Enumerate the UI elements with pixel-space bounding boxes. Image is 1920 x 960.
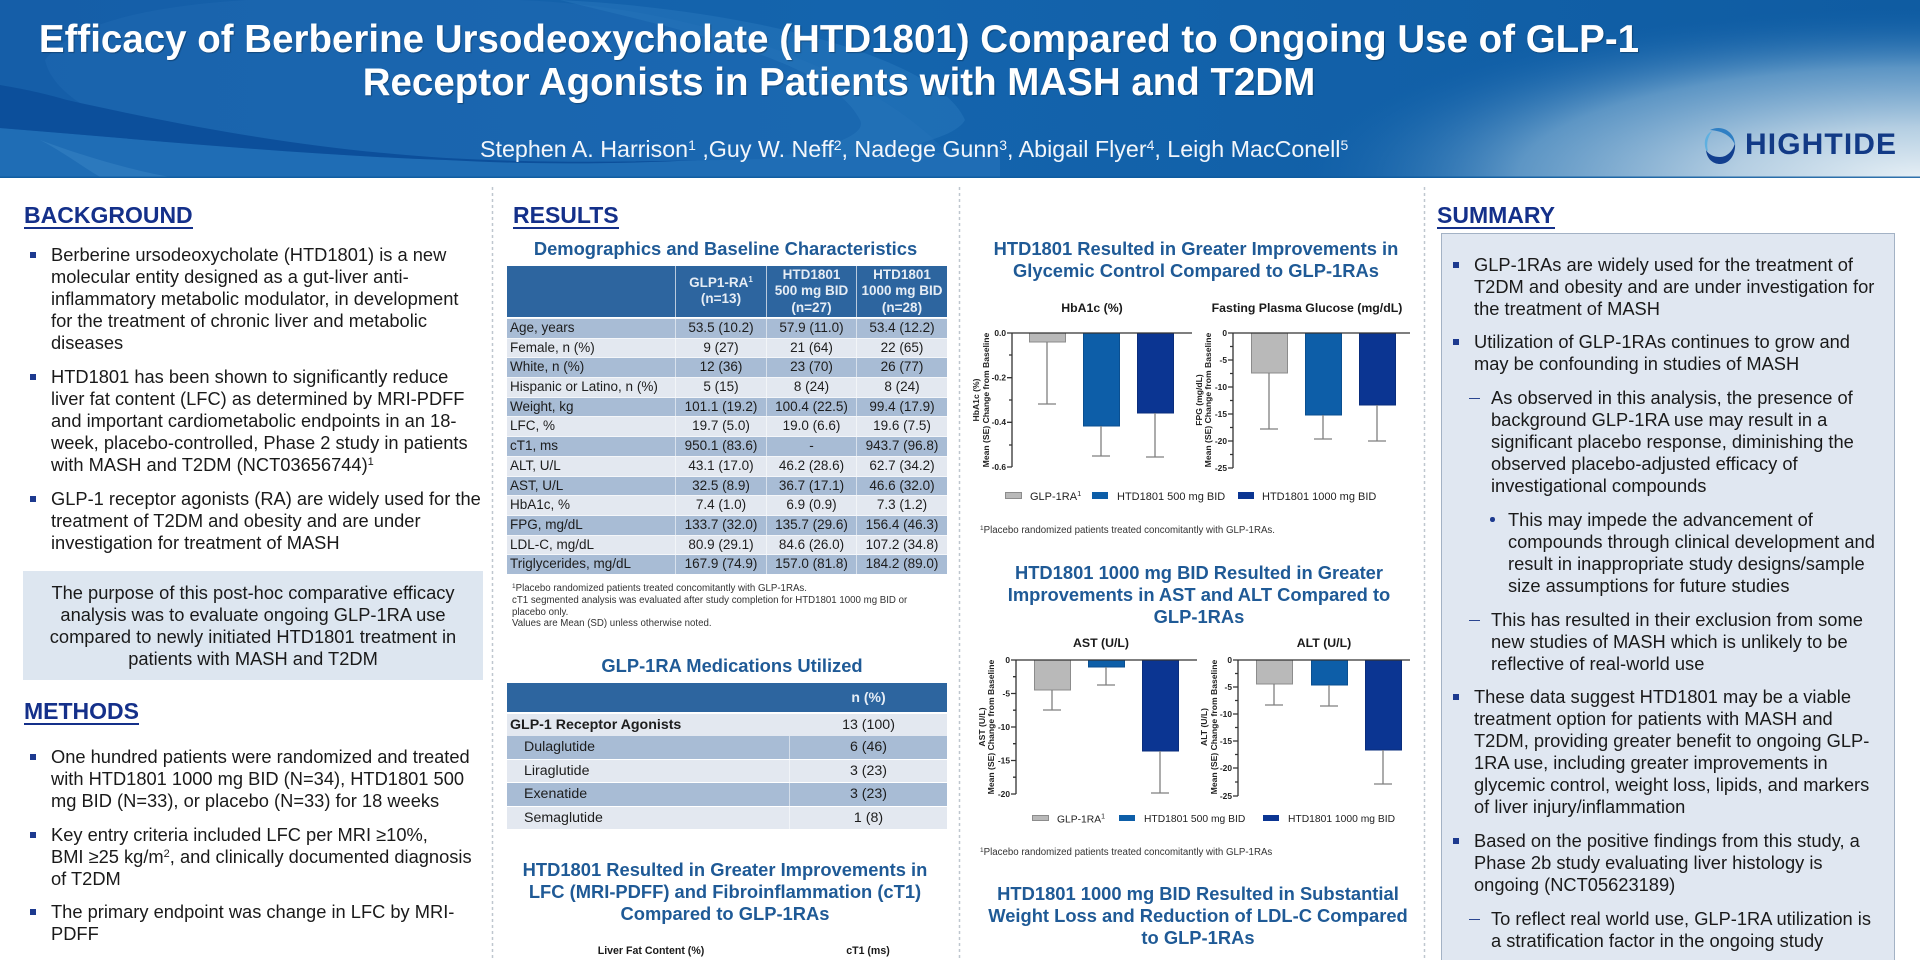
table header [507,266,947,317]
subheading: glycemic control: HTD1801 Resulted in Greater Improvements in [994,238,1398,259]
table rows: 8 (24) [794,379,829,394]
chart: HbA1c: -0.2 [992,372,1006,382]
subheading: AST and ALT: HTD1801 1000 mg BID Resulted in Greater [1015,562,1383,583]
bullet: Phase 2b study: Based on the positive findings from this study, a [1474,830,1860,851]
table rows: 23 (70) [790,359,833,374]
table rows: Hispanic or Latino, n (%) [510,379,658,394]
table rows: Age, years [510,320,575,335]
callout: purpose of the analysis: analysis was to evaluate ongoing GLP-1RA use [60,604,446,625]
chart: fasting plasma glucose: 0 [1222,328,1227,338]
bullet: treatment option: glycemic control, weight loss, lipids, and markers [1474,774,1869,795]
bullet: what HTD1801 is: Berberine ursodeoxycholate (HTD1801) is a new [51,244,446,265]
table: GLP-1RA medications [507,683,947,829]
bullet: utilization growth: may be confounding in studies of MASH [1474,353,1799,374]
bullet: randomization: One hundred patients were randomized and treated [51,746,470,767]
bullet: prior Phase 2 evidence [30,366,468,475]
legend: liver enzyme charts: GLP-1RA [1057,814,1101,826]
poster title: Efficacy of Berberine Ursodeoxycholate (HTD1801) Compared to Ongoing Use of GLP-1 [39,18,1639,61]
chart: ALT: Mean (SE) Change from Baseline [1209,659,1219,794]
panel: background [23,202,483,680]
table rows: 9 (27) [703,340,739,355]
chart: AST: -5 [1003,688,1010,698]
table rows: Weight, kg [510,399,574,414]
table rows: 99.4 (17.9) [869,399,935,414]
chart: HbA1c: -0.4 [992,417,1006,427]
table rows: 157.0 (81.8) [775,556,848,571]
table rows: 19.6 (7.5) [873,418,931,433]
chart: ALT: -25 [1220,791,1232,801]
table rows: 135.7 (29.6) [775,517,848,532]
bullet: entry criteria: of T2DM [51,868,121,889]
chart: AST: 0 [1005,655,1010,665]
footnote: glycemic charts: 1Placebo randomized patients treated concomitantly with GLP-1RAs. [980,525,1275,536]
bullet: what HTD1801 is: inflammatory metabolic modulator, in development [51,288,458,309]
authors: Stephen A. Harrison1 ,Guy W. Neff2, Nadege Gunn3, Abigail Flyer4, Leigh MacConell5 [480,136,1348,162]
chart: ALT: -15 [1220,736,1232,746]
row: liraglutide [507,760,947,782]
table rows: LDL-C, mg/dL [510,537,594,552]
bullet: entry criteria: Key entry criteria included LFC per MRI ≥10%, [51,824,428,845]
bullet: randomization: mg BID (N=33), or placebo (N=33) for 18 weeks [51,790,439,811]
table rows: 19.7 (5.0) [692,418,750,433]
chart: ALT: -10 [1220,709,1232,719]
table rows: 80.9 (29.1) [688,537,754,552]
bullet: treatment option: treatment option for patients with MASH and [1474,708,1833,729]
bullet: GLP-1 receptor agonists: treatment of T2DM and obesity and are under [51,510,421,531]
chart title: cT1: cT1 (ms) [846,945,890,957]
callout: purpose of the analysis: compared to newly initiated HTD1801 treatment in [50,626,456,647]
bullet: what HTD1801 is: for the treatment of chronic liver and metabolic [51,310,427,331]
chart: AST: -20 [998,789,1010,799]
summary box [1441,233,1895,960]
footnote: liver enzyme charts: 1Placebo randomized patients treated concomitantly with GLP-1RAs [980,847,1272,858]
chart: ALT: ALT (U/L) [1297,636,1351,650]
bullet: randomization [30,746,470,811]
table rows: 101.1 (19.2) [685,399,757,414]
bullet: entry criteria [30,824,472,889]
sub-sub-bullet: clinical development [1490,509,1875,596]
bullet: Phase 2b study: ongoing (NCT05623189) [1474,874,1675,895]
row: liraglutide: Liraglutide [524,763,589,779]
table header: 1000 mg BID [861,283,943,298]
chart: HbA1c: HbA1c (%) [1061,301,1123,315]
chart: fasting plasma glucose: -5 [1220,355,1227,365]
chart: fasting plasma glucose: Mean (SE) Change from Baseline [1203,332,1213,467]
sub-sub-bullet: clinical development: compounds through clinical development and [1508,531,1875,552]
table rows: 167.9 (74.9) [685,556,757,571]
table rows: Triglycerides, mg/dL [510,556,631,571]
chart: AST: Mean (SE) Change from Baseline [986,659,996,794]
table rows: 100.4 (22.5) [775,399,848,414]
legend: glycemic charts: HTD1801 500 mg BID [1117,491,1225,503]
table rows: 19.0 (6.6) [783,418,840,433]
bullet: what HTD1801 is [30,244,458,353]
bullet: GLP-1RA use: T2DM and obesity and are under investigation for [1474,276,1874,297]
table header: (n=13) [701,291,741,306]
sub-bullet: stratification: To reflect real world use, GLP-1RA utilization is [1491,908,1871,929]
legend: glycemic charts: GLP-1RA [1030,491,1077,503]
subheading: LFC and cT1 results: HTD1801 Resulted in Greater Improvements in [523,859,927,880]
row: semaglutide [507,807,947,829]
sub-sub-bullet: clinical development: result in inappropriate study designs/sample [1508,553,1865,574]
subheading: weight and LDL-C: HTD1801 1000 mg BID Resulted in Substantial [997,883,1399,904]
sub-bullet: placebo response: background GLP-1RA use may result in a [1491,409,1827,430]
table rows: 943.7 (96.8) [866,438,938,453]
footnote: demographics table: Values are Mean (SD) unless otherwise noted. [512,618,712,629]
sub-bullet: placebo response: observed placebo-adjusted efficacy of [1491,453,1798,474]
row: liraglutide: 3 (23) [850,763,887,779]
bullet: GLP-1RA use: the treatment of MASH [1474,298,1660,319]
table header: GLP1-RA1 [689,275,753,290]
banner background swoosh [0,0,1920,178]
table rows: 156.4 (46.3) [866,517,938,532]
panel: results, charts [971,238,1410,948]
table rows: 53.5 (10.2) [688,320,754,335]
legend: liver enzyme charts: HTD1801 500 mg BID [1144,814,1245,825]
table rows: 26 (77) [881,359,923,374]
sub-bullet: stratification [1469,908,1871,951]
bullet: primary endpoint [30,901,454,944]
bullet: Phase 2b study: Phase 2b study evaluating liver histology is [1474,852,1823,873]
footnote: demographics table: placebo only. [512,607,568,618]
subheading: weight and LDL-C [988,883,1408,948]
bullet: prior Phase 2 evidence: with MASH and T2DM (NCT03656744)1 [51,454,374,475]
sub-bullet: stratification: a stratification factor in the ongoing study [1491,930,1823,951]
bullet: GLP-1RA use [1453,254,1874,319]
subheading: AST and ALT: Improvements in AST and ALT Compared to [1008,584,1390,605]
chart: AST: AST (U/L) [1073,636,1129,650]
chart: fasting plasma glucose: -15 [1215,409,1227,419]
chart: fasting plasma glucose: FPG (mg/dL) [1194,374,1204,426]
chart: fasting plasma glucose [1194,301,1410,473]
table rows: ALT, U/L [510,458,561,473]
header banner [0,0,1920,178]
table: demographics and baseline characteristics [507,266,947,574]
bullet: treatment option [1453,686,1869,817]
footnote: demographics table [512,583,908,629]
bullet: prior Phase 2 evidence: and important cardiometabolic endpoints in an 18- [51,410,456,431]
bullet: GLP-1 receptor agonists: GLP-1 receptor agonists (RA) are widely used for the [51,488,481,509]
table header: (n=28) [882,300,922,315]
table rows: 57.9 (11.0) [779,320,844,335]
table rows: 184.2 (89.0) [866,556,938,571]
liver enzyme charts [977,636,1410,801]
table rows: 107.2 (34.8) [866,537,938,552]
row: dulaglutide: 6 (46) [850,739,887,755]
table rows: 32.5 (8.9) [692,478,750,492]
row: exenatide [507,783,947,806]
table rows: 5 (15) [703,379,739,394]
bullet: entry criteria: BMI ≥25 kg/m2, and clinically documented diagnosis [51,846,472,867]
table rows: 6.9 (0.9) [786,497,837,512]
row: class total [507,714,947,736]
table rows: 53.4 (12.2) [869,320,935,335]
table rows: 84.6 (26.0) [779,537,844,552]
bullet: treatment option: T2DM, providing greater benefit to ongoing GLP- [1474,730,1869,751]
heading: background: BACKGROUND [24,202,193,228]
callout: purpose of the analysis: patients with MASH and T2DM [128,648,378,669]
row: semaglutide: 1 (8) [854,810,883,826]
table rows: 7.3 (1.2) [877,497,927,512]
table header: HTD1801 [873,267,931,282]
table rows [507,318,947,574]
chart: fasting plasma glucose: -20 [1215,436,1227,446]
heading: summary: SUMMARY [1437,202,1555,228]
subheading: LFC and cT1 results: Compared to GLP-1RAs [621,903,829,924]
chart: AST: -15 [998,756,1010,766]
sub-bullet: placebo response: As observed in this analysis, the presence of [1491,387,1853,408]
chart: ALT: ALT (U/L) [1199,708,1209,746]
sub-bullet: placebo response [1469,387,1854,496]
table rows: HbA1c, % [510,497,570,512]
bullet: treatment option: of liver injury/inflammation [1474,796,1685,817]
chart: fasting plasma glucose: Fasting Plasma Glucose (mg/dL) [1212,301,1402,315]
panel: summary [1437,202,1895,960]
subheading: LFC and cT1 results [523,859,927,924]
glycemic charts [971,301,1410,473]
table header [507,683,947,712]
subheading: demographics: Demographics and Baseline Characteristics [534,238,917,259]
bullet: randomization: with HTD1801 1000 mg BID (N=34), HTD1801 500 [51,768,464,789]
table rows: 950.1 (83.6) [685,438,757,453]
bullet: GLP-1 receptor agonists [30,488,481,553]
table rows: 133.7 (32.0) [685,517,757,532]
logo wordmark: HIGHTIDE [1745,128,1897,161]
legend: glycemic charts: 1 [1077,489,1081,498]
table rows: 46.2 (28.6) [779,458,844,473]
panel: results, tables [507,202,947,957]
chart: AST: -10 [998,722,1010,732]
bullet: GLP-1RA use: GLP-1RAs are widely used for the treatment of [1474,254,1853,275]
sub-bullet: exclusion: This has resulted in their exclusion from some [1491,609,1863,630]
table rows: Female, n (%) [510,340,595,355]
bullet: Phase 2b study [1453,830,1860,895]
bullet: GLP-1 receptor agonists: investigation for treatment of MASH [51,532,340,553]
chart: HbA1c: Mean (SE) Change from Baseline [981,332,991,467]
footnote: demographics table: 1Placebo randomized patients treated concomitantly with GLP-1RAs. [512,583,807,594]
subheading: weight and LDL-C: Weight Loss and Reduction of LDL-C Compared [988,905,1408,926]
sub-bullet: placebo response: investigational compounds [1491,475,1706,496]
bullet: what HTD1801 is: molecular entity designed as a gut-liver anti- [51,266,409,287]
legend: liver enzyme charts: 1 [1101,814,1105,820]
chart: ALT: -5 [1225,682,1232,692]
table rows: 21 (64) [790,340,833,355]
chart: ALT: -20 [1220,763,1232,773]
table rows: 43.1 (17.0) [688,458,754,473]
table header: n (%) [851,689,886,705]
bullet: prior Phase 2 evidence: liver fat content (LFC) as determined by MRI-PDFF [51,388,464,409]
subheading: glycemic control: Glycemic Control Compared to GLP-1RAs [1013,260,1379,281]
row: exenatide: Exenatide [524,786,587,802]
poster title: Receptor Agonists in Patients with MASH and T2DM [363,61,1315,104]
chart: fasting plasma glucose: -10 [1215,382,1227,392]
table rows: 8 (24) [884,379,920,394]
sub-bullet: placebo response: significant placebo response, diminishing the [1491,431,1854,452]
table rows: 12 (36) [700,359,742,374]
callout: purpose of the analysis: The purpose of this post-hoc comparative efficacy [51,582,455,603]
subheading: AST and ALT [1008,562,1390,627]
bullet: prior Phase 2 evidence: HTD1801 has been shown to significantly reduce [51,366,448,387]
chart: HbA1c [971,301,1192,472]
chart title: liver fat content: Liver Fat Content (%) [598,945,704,957]
bullet: primary endpoint: The primary endpoint was change in LFC by MRI- [51,901,454,922]
row: dulaglutide [507,736,947,759]
bullet: utilization growth: Utilization of GLP-1RAs continues to grow and [1474,331,1850,352]
sub-sub-bullet: clinical development: This may impede the advancement of [1508,509,1813,530]
legend: liver enzyme charts [1032,814,1395,826]
legend: liver enzyme charts: HTD1801 1000 mg BID [1288,814,1395,825]
table rows: 7.4 (1.0) [696,497,746,512]
sub-bullet: exclusion: new studies of MASH which is unlikely to be [1491,631,1848,652]
bullet: primary endpoint: PDFF [51,923,99,944]
subheading: LFC and cT1 results: LFC (MRI-PDFF) and Fibroinflammation (cT1) [529,881,921,902]
table rows: - [809,438,814,453]
panel: methods [24,698,472,944]
sub-bullet: exclusion [1469,609,1863,674]
row: class total: GLP-1 Receptor Agonists [510,717,681,733]
bullet: treatment option: 1RA use, including greater improvements in [1474,752,1828,773]
table header: 500 mg BID [775,283,848,298]
sub-bullet: exclusion: reflective of real-world use [1491,653,1704,674]
subheading: glycemic control [994,238,1398,281]
row: exenatide: 3 (23) [850,786,887,802]
heading: results: RESULTS [513,202,619,228]
table rows: cT1, ms [510,438,558,453]
table rows: 46.6 (32.0) [869,478,935,492]
bullet: utilization growth [1453,331,1850,374]
legend: glycemic charts: HTD1801 1000 mg BID [1262,491,1376,503]
row: dulaglutide: Dulaglutide [524,739,595,755]
callout: purpose of the analysis [23,571,483,680]
chart: HbA1c: 0.0 [994,328,1006,338]
subheading: medications: GLP-1RA Medications Utilized [601,655,863,676]
legend: glycemic charts [1005,489,1376,503]
table rows: FPG, mg/dL [510,517,583,532]
heading: methods: METHODS [24,698,139,724]
table rows: AST, U/L [510,478,563,492]
table rows: 22 (65) [881,340,923,355]
chart: ALT: 0 [1227,655,1232,665]
chart: AST [977,636,1197,799]
footnote: demographics table: cT1 segmented analysis was evaluated after study completion for HTD1801 1000 mg BID or [512,595,907,606]
chart: fasting plasma glucose: -25 [1215,463,1227,473]
poster title [39,18,1640,104]
bullet: what HTD1801 is: diseases [51,332,123,353]
icon: Hightide logo swirl [1704,128,1736,164]
sub-sub-bullet: clinical development: size assumptions for future studies [1508,575,1789,596]
bullet: prior Phase 2 evidence: week, placebo-controlled, Phase 2 study in patients [51,432,468,453]
table rows: White, n (%) [510,359,584,374]
chart: AST: AST (U/L) [977,707,987,747]
chart: HbA1c: HbA1c (%) [971,378,981,421]
table rows: 62.7 (34.2) [869,458,935,473]
table rows: LFC, % [510,418,555,433]
row: class total: 13 (100) [842,717,895,733]
table rows: 36.7 (17.1) [779,478,844,492]
chart: ALT [1199,636,1410,801]
table header: HTD1801 [783,267,840,282]
bullet: treatment option: These data suggest HTD1801 may be a viable [1474,686,1851,707]
table header: (n=27) [791,300,832,315]
row: semaglutide: Semaglutide [524,810,603,826]
subheading: weight and LDL-C: to GLP-1RAs [1141,927,1255,948]
subheading: AST and ALT: GLP-1RAs [1154,606,1244,627]
chart: HbA1c: -0.6 [992,462,1006,472]
